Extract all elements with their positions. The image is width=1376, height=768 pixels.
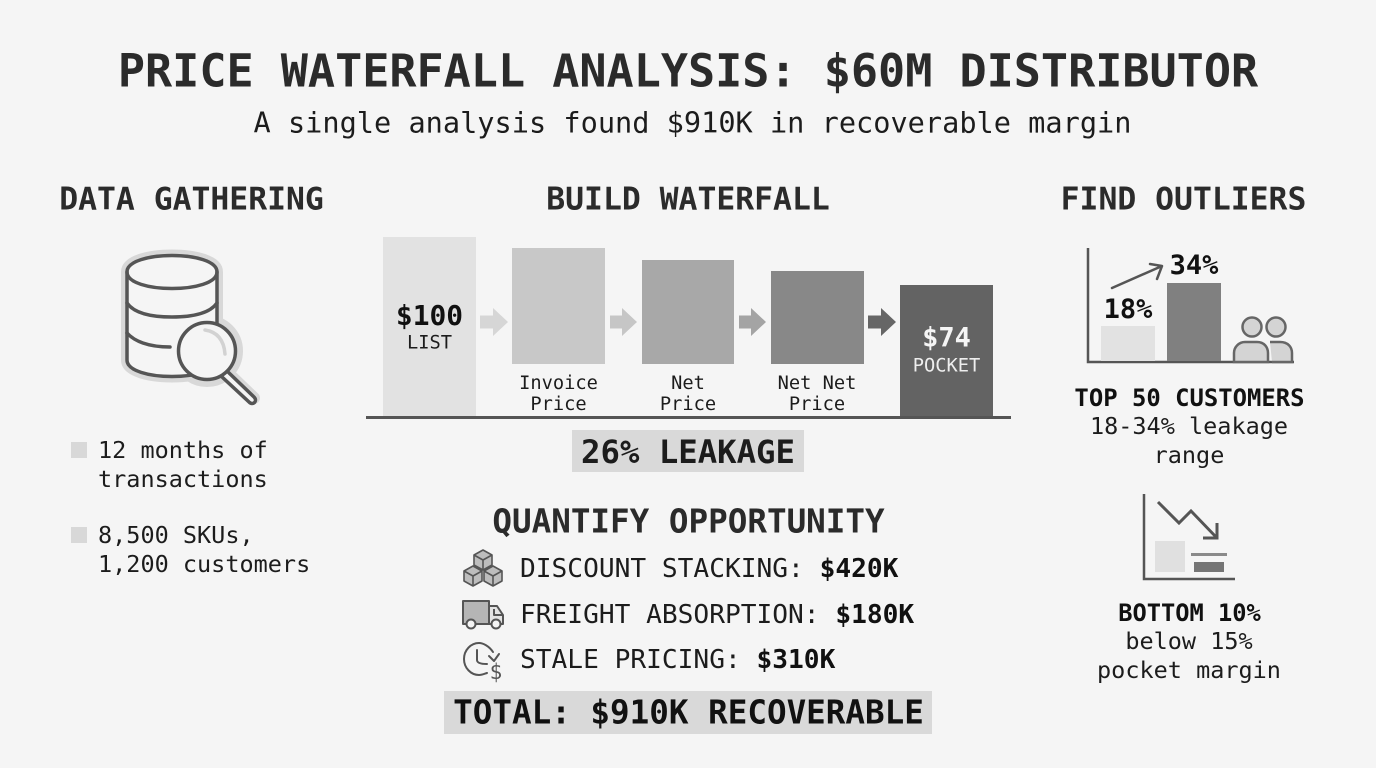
label: invoice price: Price [530, 394, 587, 414]
icon: stacked boxes [463, 549, 503, 587]
row: freight absorption: FREIGHT ABSORPTION: $180K [520, 599, 914, 629]
text: leakage range [1090, 412, 1288, 469]
label: net net price [778, 372, 856, 414]
chart: margin decline [1142, 494, 1235, 580]
label: list: LIST [407, 332, 452, 353]
label: top 50 customers: TOP 50 CUSTOMERS [1074, 384, 1305, 412]
chart: leakage bars: 34% [1170, 250, 1219, 281]
subtitle: A single analysis found $910K in recoverable margin [254, 105, 1131, 139]
bullet marker: skus [71, 527, 87, 543]
bullet text: skus: 8,500 SKUs, 1,200 customers [98, 521, 310, 578]
value: $100: $100 [396, 299, 463, 332]
panel: data gathering [59, 181, 324, 578]
label: net net price: Price [789, 394, 845, 414]
callout: 26% leakage: 26% LEAKAGE [581, 432, 795, 470]
bullet marker: transactions [71, 442, 87, 458]
text: pocket margin [1097, 627, 1281, 684]
panel: build waterfall [366, 181, 1011, 472]
arrow: net to net net [739, 308, 766, 336]
icon: database with magnifier [121, 250, 260, 406]
arrow: net net to pocket [868, 308, 896, 336]
text: pocket margin: pocket margin [1097, 656, 1281, 684]
icon: clock with dollar: $ [490, 660, 502, 684]
heading: quantify opportunity: QUANTIFY OPPORTUNITY [492, 503, 885, 541]
label: invoice price: Invoice [519, 372, 598, 394]
value: $74: $74 [922, 322, 971, 354]
row: stale pricing: STALE PRICING: $310K [520, 645, 835, 675]
icon: truck [462, 600, 504, 630]
bar: net net price [771, 271, 864, 364]
axis baseline [366, 416, 1011, 418]
heading: build waterfall: BUILD WATERFALL [546, 181, 830, 217]
bullet text: transactions: 12 months of transactions [98, 436, 268, 493]
label: net price: Price [660, 394, 716, 414]
label: net price [660, 372, 716, 414]
bar: list price [383, 237, 476, 416]
label: net net price: Net Net [778, 372, 856, 394]
text: leakage range: range [1154, 441, 1224, 469]
label: net price: Net [671, 372, 705, 394]
text: pocket margin: below 15% [1125, 627, 1253, 655]
label: invoice price [519, 372, 598, 414]
heading: data gathering: DATA GATHERING [59, 181, 324, 217]
text: leakage range: 18-34% leakage [1090, 412, 1288, 440]
arrow: invoice to net [610, 308, 637, 336]
panel: find outliers [1061, 181, 1306, 684]
label: pocket: POCKET [913, 355, 980, 376]
heading: find outliers: FIND OUTLIERS [1061, 181, 1306, 217]
bar: pocket price [900, 285, 993, 416]
chart: leakage bars [1086, 248, 1294, 364]
panel: quantify opportunity [444, 503, 932, 734]
title: PRICE WATERFALL ANALYSIS: $60M DISTRIBUTOR [118, 44, 1258, 97]
row: discount stacking: DISCOUNT STACKING: $420K [520, 554, 898, 584]
bar: net price [642, 260, 734, 364]
icon: clock with dollar [463, 642, 502, 684]
label: bottom 10%: BOTTOM 10% [1118, 599, 1261, 627]
arrow: list to invoice [480, 308, 508, 336]
callout: total recoverable: TOTAL: $910K RECOVERABLE [453, 694, 924, 732]
bar: invoice price [512, 248, 605, 364]
chart: leakage bars: 18% [1104, 294, 1153, 325]
